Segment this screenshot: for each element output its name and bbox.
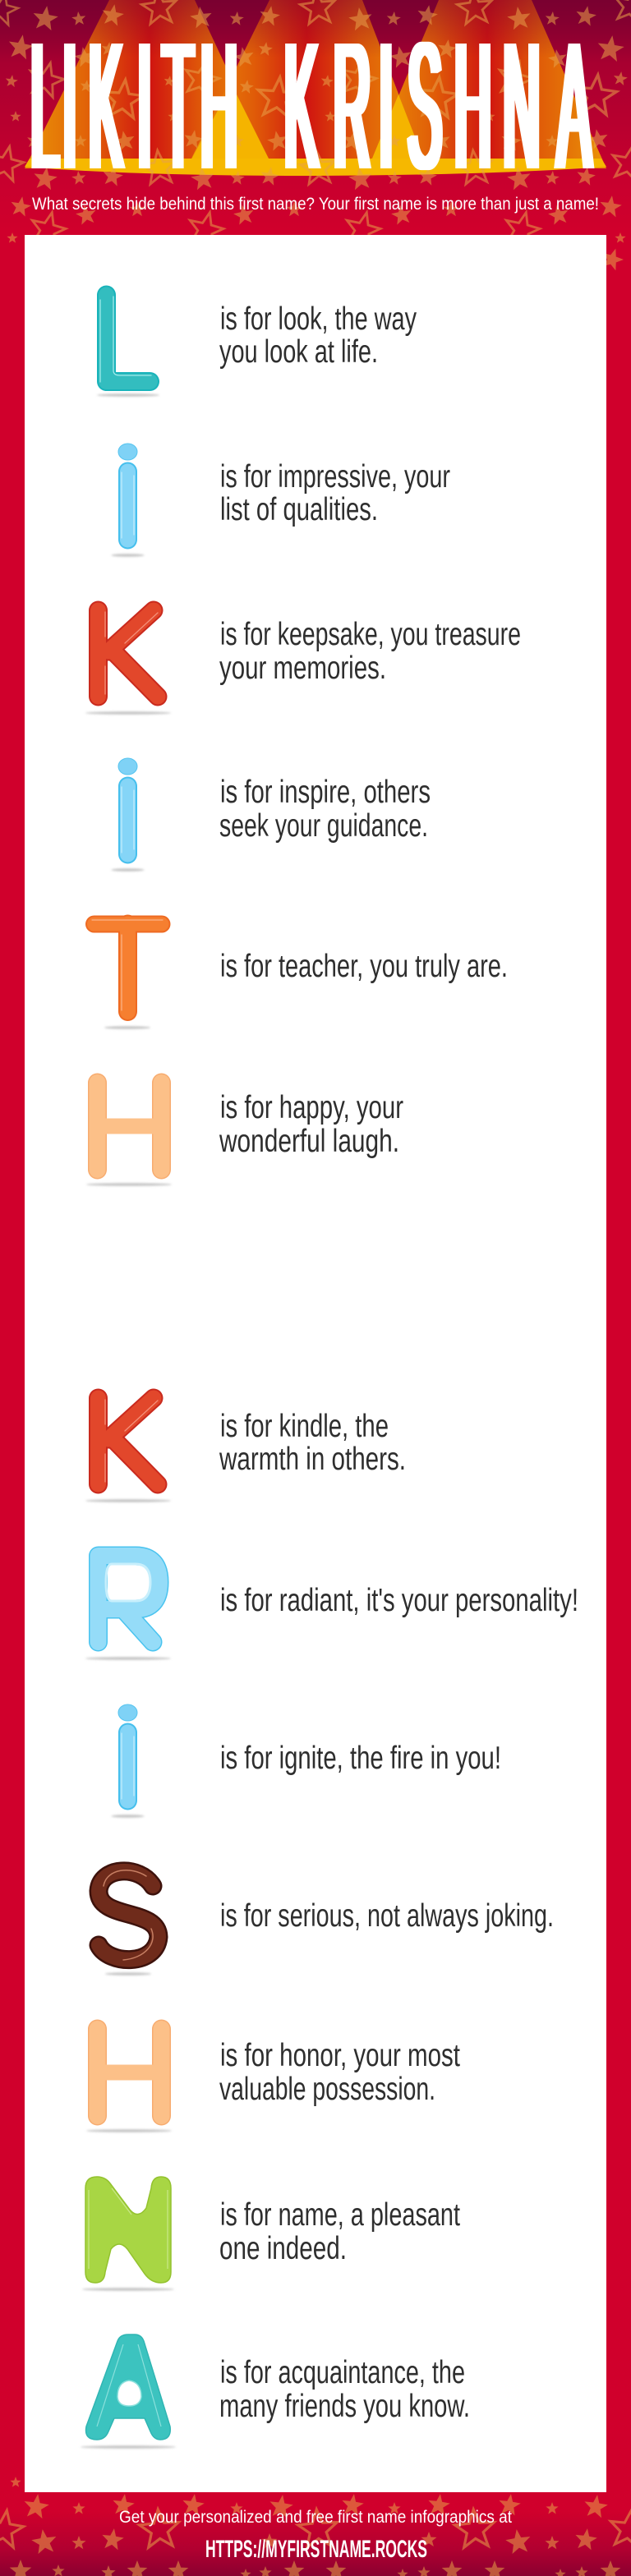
text: A: is for acquaintance, the [220, 2355, 465, 2390]
title: LIKITH KRISHNA [30, 5, 592, 208]
text: H [219, 1090, 403, 1159]
text: N [219, 2197, 460, 2266]
text: H: is for happy, your [220, 1090, 403, 1125]
footer url: HTTPS://MYFIRSTNAME.ROCKS [205, 2536, 427, 2563]
spotlights [0, 0, 631, 176]
text: L: you look at life. [219, 334, 378, 370]
text: K: is for keepsake, you treasure [220, 617, 521, 652]
letter R icon [85, 1556, 171, 1660]
text: K [219, 1409, 406, 1477]
footer text: Get your personalized and free first name infographics at [119, 2508, 512, 2527]
text: i: list of qualities. [220, 492, 378, 527]
text: L: is for look, the way [220, 301, 417, 337]
letter K icon [85, 1398, 171, 1502]
text: i: is for ignite, the fire in you! [220, 1741, 501, 1776]
text: i: seek your guidance. [219, 808, 428, 844]
letter T icon [92, 920, 163, 1029]
text: H: is for honor, your most [220, 2038, 460, 2073]
footer stars [10, 2477, 620, 2576]
text: H: valuable possession. [219, 2072, 435, 2107]
letter i icon [112, 758, 145, 872]
text: N: one indeed. [219, 2231, 347, 2266]
letter A icon [81, 2334, 176, 2449]
letter i icon [112, 444, 145, 557]
letter S icon [99, 1870, 159, 1976]
text: L [219, 301, 417, 370]
text: A: many friends you know. [219, 2389, 470, 2424]
letter H icon [86, 1083, 172, 1186]
text: N: is for name, a pleasant [220, 2197, 460, 2233]
text: K: your memories. [219, 651, 386, 686]
footer outlined stars [0, 2508, 631, 2548]
header stars [5, 2, 629, 270]
letter K icon [85, 610, 171, 715]
text: A [219, 2355, 470, 2424]
text: H: wonderful laugh. [219, 1124, 399, 1159]
text: i [219, 775, 431, 844]
letter N icon [82, 2177, 174, 2291]
text: H [219, 2038, 460, 2107]
letter H icon [86, 2029, 172, 2132]
text: T: is for teacher, you truly are. [220, 949, 508, 984]
text: i: is for inspire, others [220, 775, 431, 810]
letter i icon [112, 1704, 145, 1818]
text: i: is for impressive, your [220, 459, 450, 494]
text: K: is for kindle, the [220, 1409, 389, 1444]
letter L icon [97, 295, 159, 397]
text: i [220, 459, 450, 527]
header outlined stars [0, 0, 631, 248]
text: K: warmth in others. [219, 1442, 406, 1477]
text: K [219, 617, 521, 686]
